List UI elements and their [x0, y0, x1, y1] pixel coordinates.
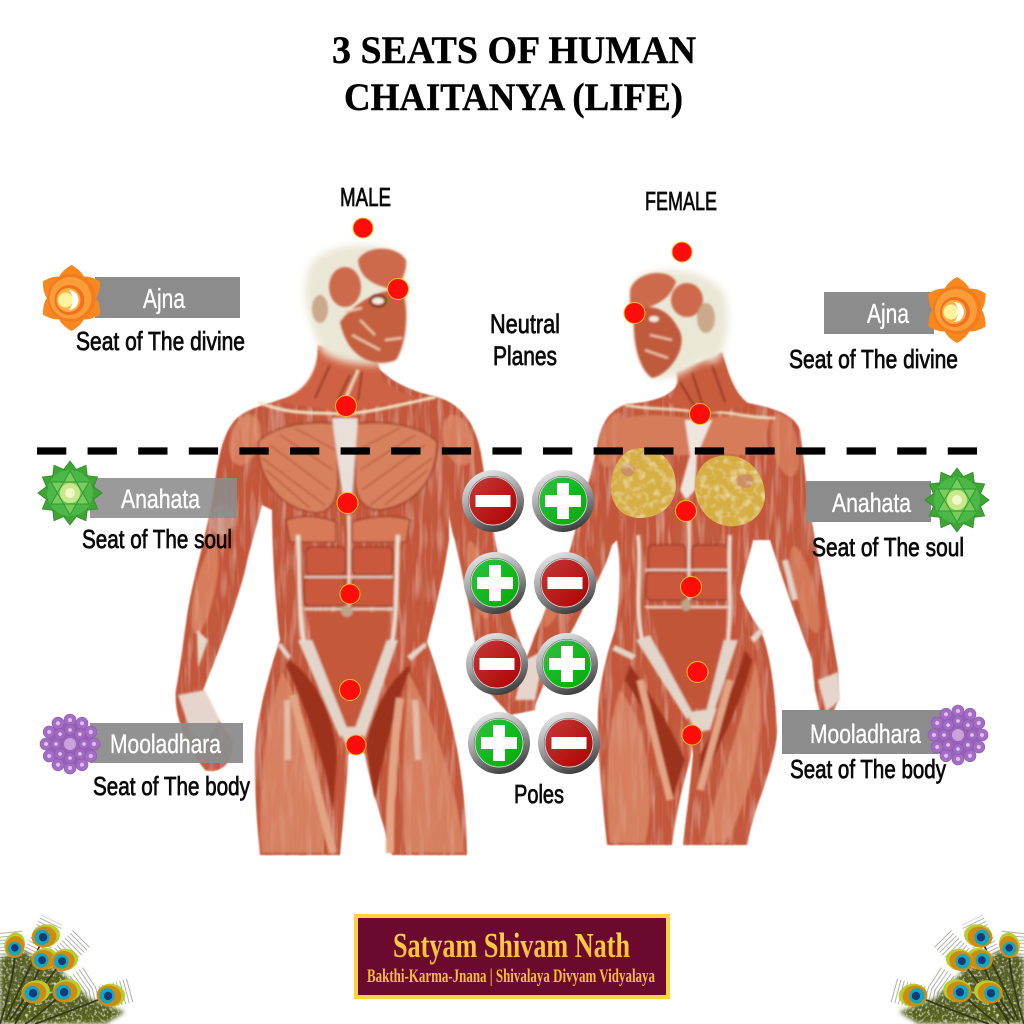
peacock feathers: bottom left: [0, 920, 132, 1024]
right callout: Ajna: Seat of The divine: [789, 344, 958, 374]
left callout: Ajna: Seat of The divine: [76, 326, 245, 356]
right callout: Anahata: Seat of The soul: [812, 532, 964, 562]
female wrists: [515, 560, 840, 712]
female muscular figure: [508, 270, 840, 845]
female lower abdomen: [650, 608, 727, 708]
female abdominal muscles: [646, 545, 730, 600]
male muscular figure: [176, 245, 535, 855]
male pectoral muscles: [258, 423, 437, 513]
label: male: MALE: [340, 182, 391, 212]
title: CHAITANYA (LIFE): [344, 76, 683, 119]
label: neutral planes: Neutral: [490, 309, 560, 339]
left callout: Mooladhara: [40, 714, 250, 801]
female chest: [620, 405, 775, 500]
left callout: Ajna: Ajna: [143, 283, 185, 314]
female shoulders and arms: [538, 410, 826, 636]
left callout: Ajna: [36, 265, 245, 356]
male lines and v-band: [277, 640, 427, 745]
label: poles: Poles: [514, 779, 564, 809]
left callout: Anahata: Anahata: [121, 484, 201, 514]
left callout: Mooladhara: Mooladhara: [110, 729, 222, 759]
female thigh muscles: [607, 650, 761, 843]
female v-band: [612, 628, 764, 733]
peacock feathers: bottom right: [892, 920, 1024, 1024]
label: neutral planes: Planes: [493, 341, 557, 371]
male head: [305, 245, 408, 365]
logo badge: Satyam Shivam Nath: [393, 926, 630, 965]
female breasts: [611, 448, 765, 526]
logo badge: Bakthi-Karma-Jnana | Shivalaya Divyam Vidyalaya: [367, 966, 655, 987]
female neck: [665, 352, 750, 414]
right callout: Anahata: [806, 468, 989, 562]
right callout: Mooladhara: Seat of The body: [790, 754, 946, 784]
right callout: Mooladhara: [782, 705, 988, 784]
male limb highlights: [186, 411, 494, 636]
right callout: Anahata: Anahata: [832, 488, 912, 518]
dashed plane divider: [37, 447, 977, 455]
title: 3 SEATS OF HUMAN: [332, 29, 696, 72]
pole buttons: [462, 470, 600, 774]
logo badge: [356, 916, 668, 997]
male lower abdomen: [308, 612, 390, 728]
male thigh muscles: [260, 660, 464, 853]
left callout: Anahata: [38, 461, 237, 554]
male energy points: [336, 218, 408, 755]
male abdominal muscles: [286, 516, 410, 606]
left callout: Mooladhara: Seat of The body: [93, 771, 250, 801]
female energy points: [624, 242, 710, 745]
right callout: Mooladhara: Mooladhara: [810, 719, 922, 749]
male neck: [275, 345, 420, 412]
right callout: Ajna: [789, 277, 993, 374]
label: female: FEMALE: [645, 186, 717, 216]
male sternum and collarbone: [258, 397, 436, 500]
right callout: Ajna: Ajna: [867, 298, 909, 329]
label: neutral planes: [490, 309, 560, 371]
title: [332, 29, 696, 119]
left callout: Anahata: Seat of The soul: [82, 524, 232, 554]
male forearm tendons: [178, 504, 234, 745]
female head: [630, 270, 728, 379]
